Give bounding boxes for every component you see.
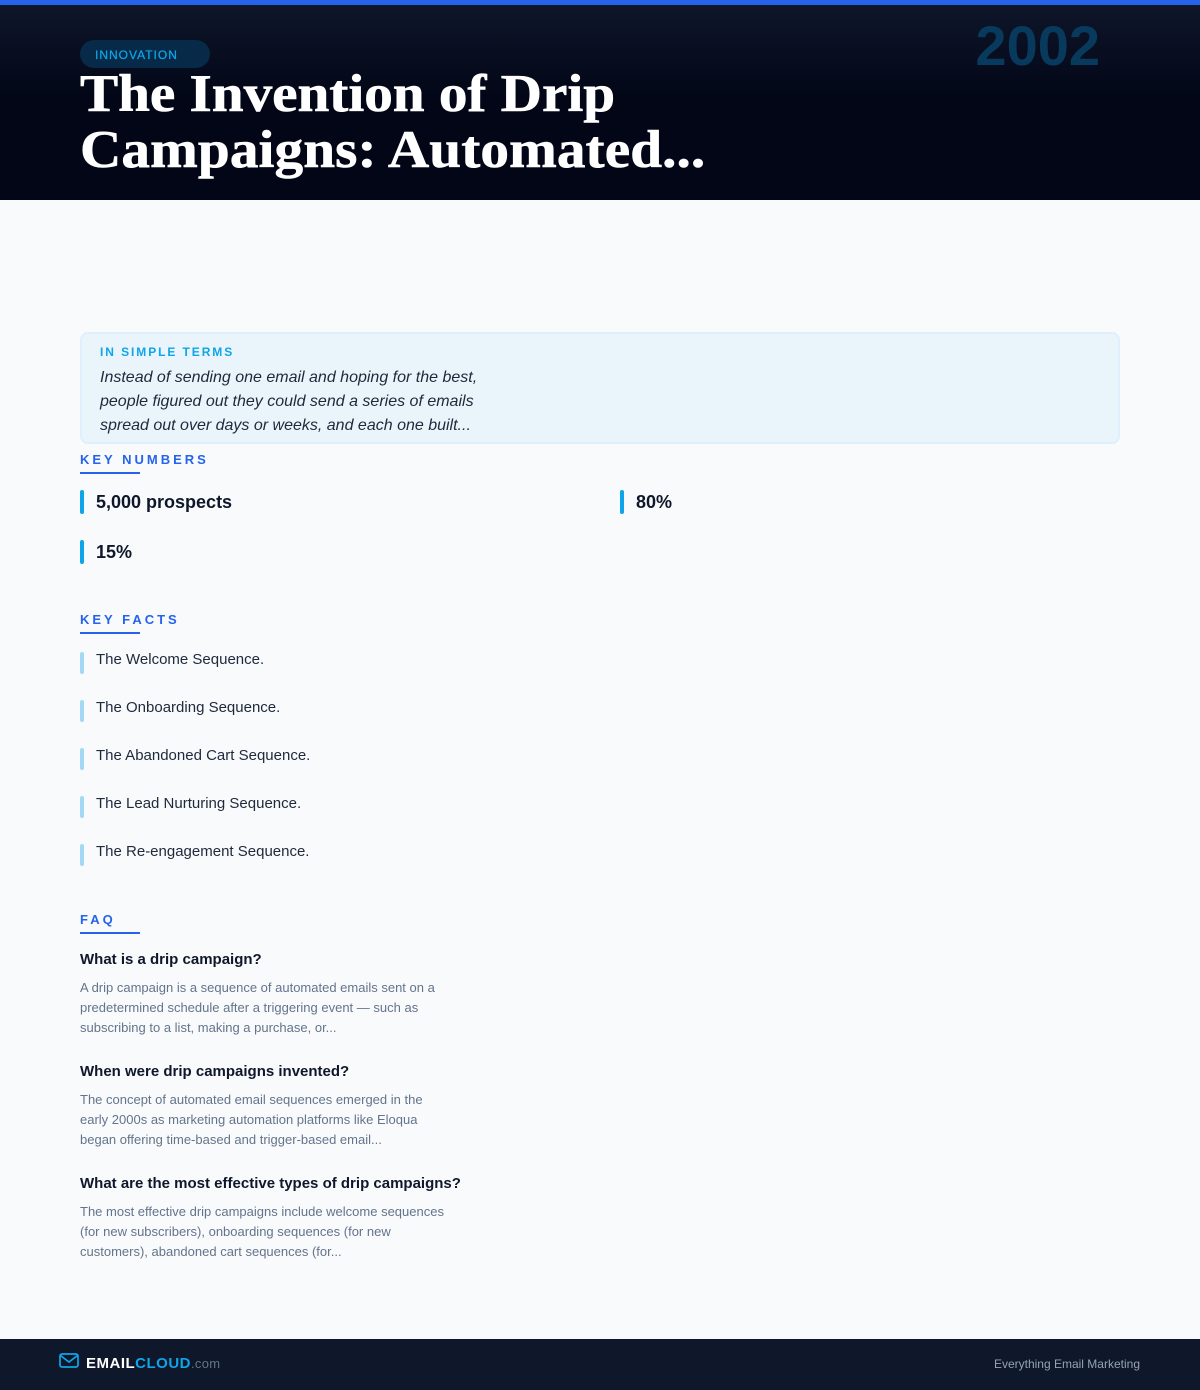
faq answer 3: (for new subscribers), onboarding sequences (for new [80,1224,391,1239]
title [80,65,705,179]
fact: onboarding [80,699,280,722]
fact: lead nurturing [80,795,301,818]
stat: 80%: 80% [636,492,672,512]
fact: welcome [80,651,264,674]
callout label: IN SIMPLE TERMS [100,345,234,359]
callout text: Instead of sending one email and hoping for the best, [100,369,477,386]
fact: abandoned cart: The Abandoned Cart Sequence. [96,747,310,764]
heading: faq: FAQ [80,912,116,927]
heading: key facts: KEY FACTS [80,612,180,627]
faq answer 1: subscribing to a list, making a purchase, or... [80,1020,337,1035]
stat: 80% [620,490,672,514]
callout text: people figured out they could send a series of emails [100,393,474,410]
faq answer 2: began offering time-based and trigger-based email... [80,1132,382,1147]
tagline: Everything Email Marketing [994,1357,1140,1371]
title: The Invention of Drip [80,65,615,123]
fact: onboarding: The Onboarding Sequence. [96,699,280,716]
callout text: spread out over days or weeks, and each one built... [100,417,471,434]
stat: 15% [80,540,132,564]
callout text [100,369,477,434]
stat: 15%: 15% [96,542,132,562]
fact: abandoned cart [80,747,310,770]
faq question 2: When were drip campaigns invented? [80,1063,349,1080]
faq answer 1 [80,980,435,1035]
header band [0,0,1200,200]
top accent bar [0,0,1200,5]
fact: re-engagement: The Re-engagement Sequence. [96,843,309,860]
year: 2002 [975,14,1100,77]
faq question 1: What is a drip campaign? [80,951,262,968]
logo wordmark: EMAILCLOUD.com [86,1355,220,1372]
footer [0,1339,1200,1390]
heading: key numbers: KEY NUMBERS [80,452,209,467]
icon: envelope [59,1353,79,1368]
faq question 3: What are the most effective types of drip campaigns? [80,1175,461,1192]
faq answer 1: predetermined schedule after a triggering event — such as [80,1000,418,1015]
stat: 5,000 prospects: 5,000 prospects [96,492,232,512]
panel: in simple terms [80,332,1120,444]
faq answer 3: customers), abandoned cart sequences (for... [80,1244,342,1259]
title: Campaigns: Automated... [80,121,705,179]
faq answer 3 [80,1204,444,1259]
faq answer 2: early 2000s as marketing automation platforms like Eloqua [80,1112,417,1127]
faq answer 3: The most effective drip campaigns include welcome sequences [80,1204,444,1219]
faq answer 2 [80,1092,423,1147]
category pill: INNOVATION [95,48,178,62]
faq answer 2: The concept of automated email sequences emerged in the [80,1092,423,1107]
fact: lead nurturing: The Lead Nurturing Sequence. [96,795,301,812]
faq answer 1: A drip campaign is a sequence of automated emails sent on a [80,980,435,995]
category pill [80,40,210,68]
fact: re-engagement [80,843,309,866]
fact: welcome: The Welcome Sequence. [96,651,264,668]
